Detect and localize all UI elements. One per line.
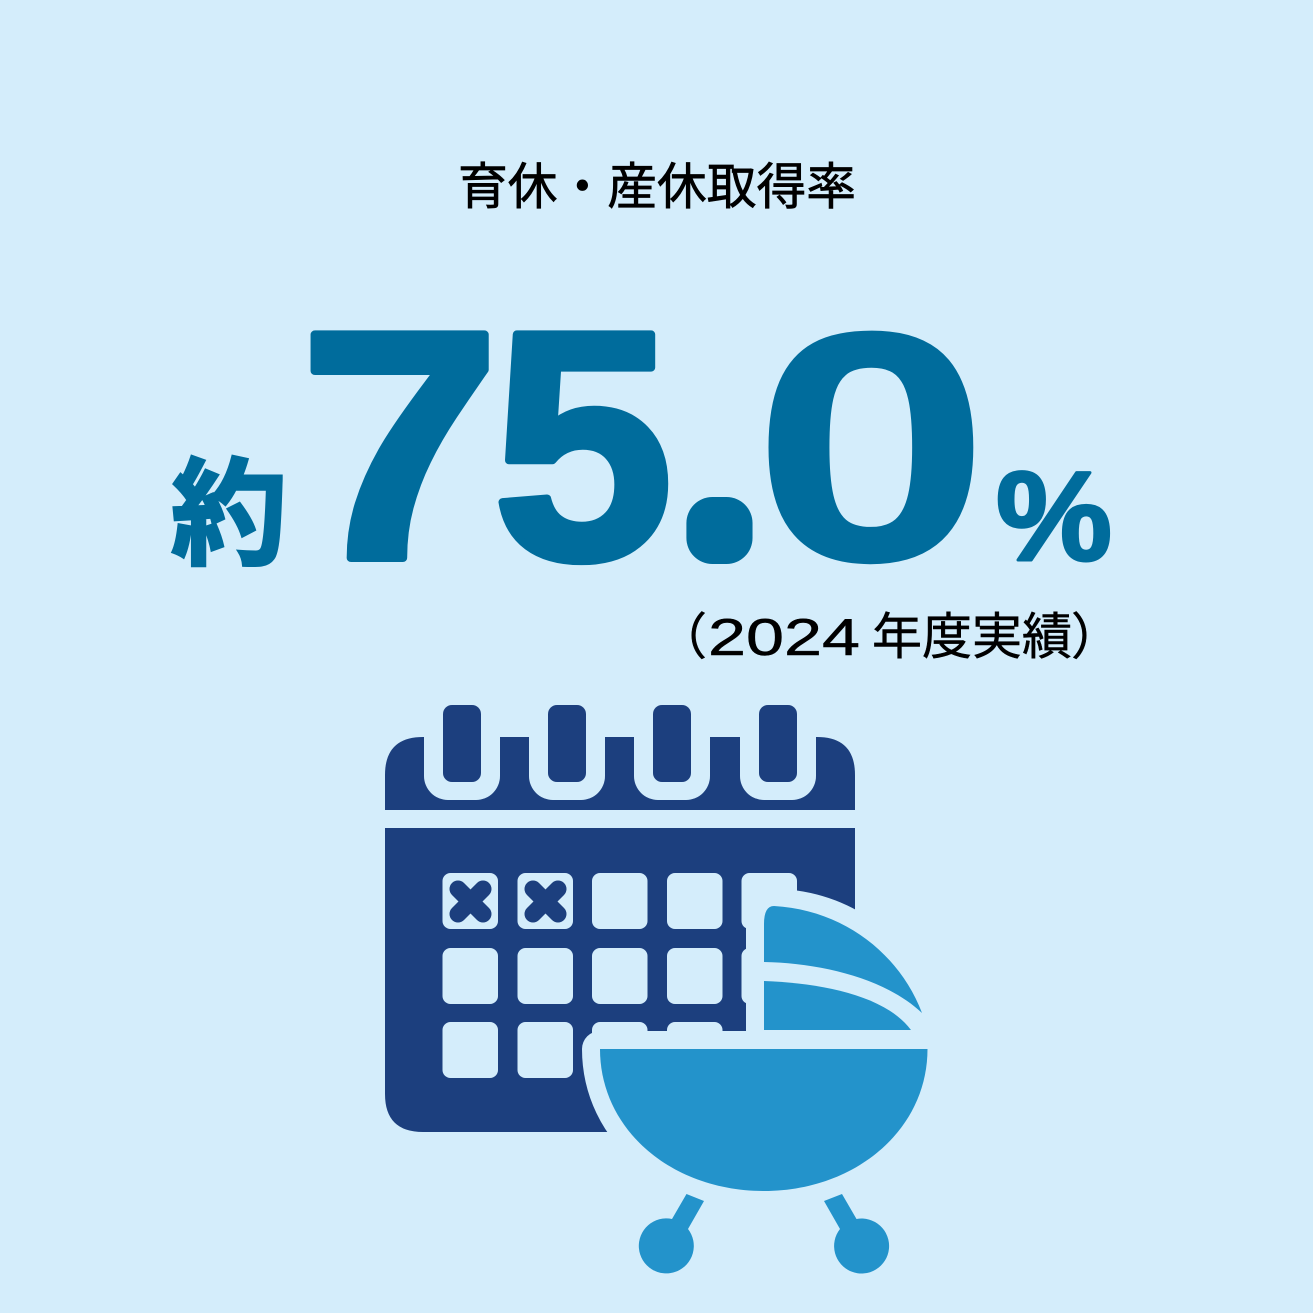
pram basket (600, 1049, 928, 1191)
pram hood upper (764, 906, 922, 1013)
note: fiscal year: 2024 (708, 609, 860, 667)
icon: calendar (385, 705, 855, 1132)
crossed-out dates (458, 889, 558, 914)
note: fiscal year: 年度実績 (872, 609, 1072, 665)
calendar header (385, 737, 855, 810)
title: 育休・産休取得率 (458, 159, 856, 215)
digit 7: 7 (300, 264, 500, 627)
percent sign: % (996, 445, 1112, 587)
digit 0: 0 (753, 265, 989, 630)
note: fiscal year: （ (657, 609, 707, 665)
pram hood lower (764, 981, 911, 1030)
calendar body (385, 828, 855, 1132)
decimal point: . (706, 448, 733, 560)
note: fiscal year: ） (1071, 609, 1121, 665)
pram halo (600, 907, 927, 1191)
digit 5: 5 (492, 264, 673, 627)
statistic: about 75.0 percent (171, 264, 1112, 630)
calendar date cells (442, 873, 797, 1078)
right wheel (824, 1194, 889, 1274)
calendar rings (424, 705, 816, 800)
icon: baby pram (600, 906, 928, 1274)
left wheel (639, 1194, 704, 1273)
prefix: 約: 約 (171, 450, 287, 580)
note: fiscal year (657, 609, 1121, 667)
